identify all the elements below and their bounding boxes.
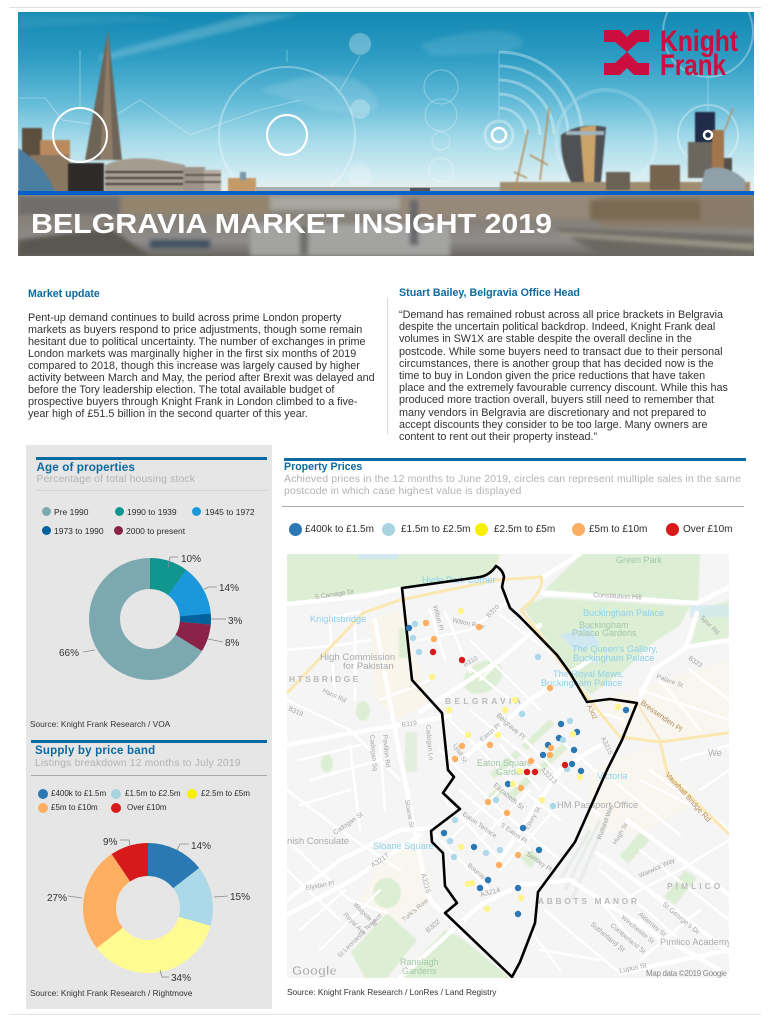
map road labels: Hans Rd	[321, 687, 347, 705]
age donut chart: 66%	[59, 648, 79, 659]
map place labels: for Pakistan	[343, 661, 394, 672]
skyline left	[18, 30, 256, 192]
map road labels: Walpole St	[352, 901, 379, 929]
quote body	[399, 309, 728, 443]
supply legend: £400k to £1.5m	[51, 789, 106, 798]
map road labels	[287, 588, 721, 975]
map road labels: Alderney St	[637, 911, 667, 938]
map place labels: nish Consulate	[287, 835, 349, 846]
map road labels: Cadogan Sq	[368, 735, 378, 772]
map road labels: Cadogan St	[332, 811, 364, 837]
supply donut chart: 14%	[191, 841, 211, 852]
map road labels: B319	[401, 720, 418, 729]
map place labels: HTSBRIDGE	[289, 674, 361, 684]
map place labels: ABBOTS MANOR	[538, 896, 640, 906]
age donut chart	[59, 554, 243, 680]
age legend: 1973 to 1990	[54, 526, 104, 536]
map road labels: Cadogan Ln	[424, 725, 434, 761]
map road labels: Constitution Hill	[593, 592, 642, 602]
supply legend: £2.5m to £5m	[201, 789, 250, 798]
map road labels: Cumberland St	[609, 922, 647, 956]
prices legend: £1.5m to £2.5m	[401, 524, 470, 535]
market update body: London markets was marginally higher in the first six months of 2019	[28, 348, 356, 360]
age legend: 1945 to 1972	[205, 507, 255, 517]
supply heading: Supply by price band	[35, 745, 155, 757]
sky	[18, 12, 754, 192]
age subheading: Percentage of total housing stock	[36, 474, 195, 485]
map place labels: High Commission	[320, 652, 395, 663]
sales points: over £10m	[430, 649, 568, 775]
prices divider	[282, 506, 744, 507]
map station labels: Buckingham Palace	[541, 678, 622, 688]
map park labels: Eaton Square	[477, 758, 532, 768]
age legend: 2000 to present	[126, 526, 185, 536]
map station labels: Knightsbridge	[310, 614, 366, 624]
map road labels: A3214	[480, 887, 501, 899]
map road labels: S Eaton Pl	[499, 822, 528, 846]
supply donut chart	[47, 837, 250, 984]
map place labels: PIMLICO	[667, 881, 723, 891]
age legend: Pre 1990	[54, 507, 88, 517]
sales points: £400k to £1.5m	[406, 625, 629, 917]
skyline distant	[256, 187, 506, 192]
map road labels: Lupus St	[619, 962, 647, 975]
map road labels: S Carriage Dr	[314, 588, 355, 601]
quote body: content to rent out their property instead.”	[399, 431, 597, 443]
prices subheading	[284, 473, 741, 497]
map place labels: BELGRAVIA	[445, 696, 524, 706]
map road labels: Elystan Pl	[305, 880, 335, 892]
prices legend: £2.5m to £5m	[494, 524, 555, 535]
prices heading: Property Prices	[284, 461, 362, 473]
map road labels: B310	[485, 603, 501, 619]
map station labels: Hyde Park Corner	[422, 575, 496, 585]
map road labels: Eaton Terrace	[461, 811, 498, 840]
supply source: Source: Knight Frank Research / Rightmove	[30, 988, 192, 998]
market update body: activity between March and May, the period after Brexit was delayed and	[28, 372, 375, 384]
walkie talkie and right cluster	[500, 108, 750, 192]
map place labels	[287, 652, 732, 978]
map park labels: Buckingham	[579, 620, 629, 630]
map major roads	[287, 577, 730, 835]
supply panel blue rule	[31, 740, 267, 743]
map station labels: The Queen's Gallery,	[572, 644, 658, 654]
map of Belgravia with sales points	[287, 554, 729, 978]
supply divider	[31, 774, 267, 776]
map place labels: HM Passport Office	[557, 799, 638, 810]
quote body: accept discounts they consider to be too large. Many owners are	[399, 419, 707, 431]
top rule	[9, 7, 761, 8]
map station labels: Buckingham Palace	[573, 653, 654, 663]
map road labels: A3216	[419, 873, 431, 894]
market update body: compared to 2018, though this increase was largely caused by higher	[28, 360, 360, 372]
supply donut chart: 15%	[230, 892, 250, 903]
panel: property prices	[282, 458, 746, 536]
prices legend: £5m to £10m	[589, 524, 647, 535]
supply legend: £5m to £10m	[51, 803, 98, 812]
map road labels: Belgrave Pl	[495, 712, 526, 742]
map road labels: Vauxhall Bridge Rd	[664, 770, 713, 824]
quote body: despite the uncertain political backdrop. Indeed, Knight Frank deal	[399, 321, 715, 333]
river reflection band	[18, 195, 754, 256]
map source: Source: Knight Frank Research / LonRes / Land Registry	[287, 987, 496, 997]
blue rule	[18, 191, 754, 195]
map station labels: Victoria	[597, 771, 628, 781]
panel: age of properties	[30, 457, 267, 729]
panel: supply by price band	[30, 740, 267, 998]
prices blue rule	[284, 458, 746, 461]
map park labels: Palace Gardens	[572, 628, 637, 638]
prices subheading: postcode in which case highest value is displayed	[284, 485, 522, 497]
sales points: £5m to £10m	[423, 620, 554, 868]
map park labels: Ranelagh	[400, 957, 439, 967]
prices legend	[289, 523, 732, 536]
office head quote block	[399, 287, 728, 443]
map park labels: Gardens	[402, 966, 437, 976]
market update body: before the Tory leadership election. The total available budget of	[28, 384, 334, 396]
map road labels: A3217	[370, 852, 391, 870]
map road labels: B302	[425, 919, 442, 935]
map place labels: Map data ©2019 Google	[646, 969, 728, 978]
map roads	[287, 554, 729, 978]
prices subheading: Achieved prices in the 12 months to June 2019, circles can represent multiple sales in the same	[284, 473, 741, 485]
white highlight rings	[53, 108, 712, 162]
logo wordmark: Frank	[660, 49, 726, 82]
market update body	[28, 312, 375, 420]
map road labels: Rutland Way	[596, 803, 616, 841]
age legend	[42, 507, 255, 536]
map road labels: Wilton Row	[452, 617, 485, 631]
map station labels	[310, 575, 664, 851]
sales points: £1.5m to £2.5m	[410, 621, 573, 860]
age donut chart: 3%	[228, 616, 243, 627]
map road labels: Bourne St	[466, 862, 493, 886]
supply legend: £1.5m to £2.5m	[125, 789, 181, 798]
map road labels: Spur Rd	[699, 614, 721, 637]
banner: London skyline photo with title	[18, 12, 754, 256]
age divider	[36, 490, 267, 491]
age legend: 1990 to 1939	[127, 507, 177, 517]
map road labels: Turk's Row	[401, 897, 430, 924]
market update body: prospective buyers through Knight Frank in London climbed to a five-	[28, 396, 358, 408]
map road labels: Palace St	[655, 673, 684, 689]
age donut chart: 8%	[225, 638, 240, 649]
age panel blue rule	[36, 457, 267, 460]
bottom rule	[9, 1014, 761, 1015]
map road labels: B310	[462, 655, 479, 669]
quote body: postcode. While some buyers need to transact due to their personal	[399, 346, 722, 358]
quote body: “Demand has remained robust across all price brackets in Belgravia	[399, 309, 723, 321]
prices legend: Over £10m	[683, 524, 732, 535]
logo wordmark	[660, 25, 738, 82]
market update body: year high of £51.5 billion in the second quarter of this year.	[28, 408, 308, 420]
banner title: BELGRAVIA MARKET INSIGHT 2019	[31, 208, 552, 239]
logo mark	[604, 30, 649, 75]
supply donut chart: 9%	[103, 837, 118, 848]
age heading: Age of properties	[36, 461, 135, 474]
market update body: Pent-up demand continues to build across prime London property	[28, 312, 341, 324]
logo wordmark: Knight	[660, 25, 738, 58]
market update body: hesitant due to political uncertainty. The number of exchanges in prime	[28, 336, 366, 348]
map place labels: We	[708, 747, 722, 758]
map park labels	[400, 555, 663, 976]
map land use	[287, 554, 729, 978]
map park labels: Green Park	[616, 555, 663, 565]
supply donut chart: 27%	[47, 893, 67, 904]
map road labels: A3215	[599, 736, 614, 756]
map road labels: Bressenden Pl	[639, 698, 684, 734]
map station labels: Buckingham Palace	[583, 608, 664, 618]
map road labels: B323	[687, 655, 704, 670]
map road labels: Pavilion Rd	[381, 735, 391, 768]
age donut chart: 10%	[181, 554, 201, 565]
map road labels: Sutherland St	[589, 921, 626, 954]
market update heading: Market update	[28, 288, 100, 300]
map road labels: Wilton Pl	[431, 605, 445, 632]
age source: Source: Knight Frank Research / VOA	[30, 719, 170, 729]
prices legend: £400k to £1.5m	[305, 524, 374, 535]
quote body: place and the extremely favourable currency discount. While this has	[399, 382, 728, 394]
map road labels: A3213	[539, 766, 558, 786]
market update body: markets as buyers respond to price adjustments, though some remain	[28, 324, 362, 336]
quote body: circumstances, there is another group that has decided now is the	[399, 358, 714, 370]
supply donut chart: 34%	[171, 973, 191, 984]
tech circles	[18, 0, 753, 203]
map road labels: B319	[287, 705, 304, 718]
map road labels: Semley Pl	[525, 851, 553, 874]
map road labels: Ebury St	[524, 806, 542, 831]
panel: left grey column	[26, 445, 272, 1009]
age donut chart: 14%	[219, 583, 239, 594]
map road labels: Hugh St	[612, 822, 630, 846]
quote heading: Stuart Bailey, Belgravia Office Head	[399, 287, 580, 299]
map road labels: Elizabeth St	[492, 782, 525, 812]
map road labels: Royal Ave	[342, 911, 367, 937]
map road labels: St Leonard's Terrace	[336, 912, 384, 959]
map station labels: The Royal Mews,	[553, 669, 624, 679]
quote body: volumes in SW1X are stable despite the overall decline in the	[399, 333, 692, 345]
map station labels: Sloane Square	[373, 841, 434, 851]
map road labels: Winchester St	[620, 914, 655, 946]
map road labels: Lyall St	[451, 742, 468, 764]
sales points: £2.5m to £5m	[429, 608, 621, 912]
column divider	[387, 298, 388, 434]
quote body: time to buy in London given the price reductions that have taken	[399, 370, 705, 382]
map road labels: Eaton Pl	[479, 722, 503, 744]
quote body: many vendors in Belgravia are discretionary and not prepared to	[399, 406, 706, 418]
supply legend: Over £10m	[127, 803, 167, 812]
supply subheading: Listings breakdown 12 months to July 2019	[35, 758, 241, 769]
market update text block	[28, 288, 375, 420]
map park labels: Gardens	[496, 767, 531, 777]
map road labels: Sloane St	[403, 799, 415, 828]
quote body: produced more traction overall, buyers still need to remember that	[399, 394, 714, 406]
map road labels: St George's Dr	[661, 901, 701, 937]
area boundary	[402, 566, 637, 977]
map road labels: Warwick Way	[638, 857, 677, 880]
map place labels: Google	[292, 963, 337, 978]
map road labels: A302	[585, 704, 598, 721]
supply legend	[38, 789, 250, 813]
